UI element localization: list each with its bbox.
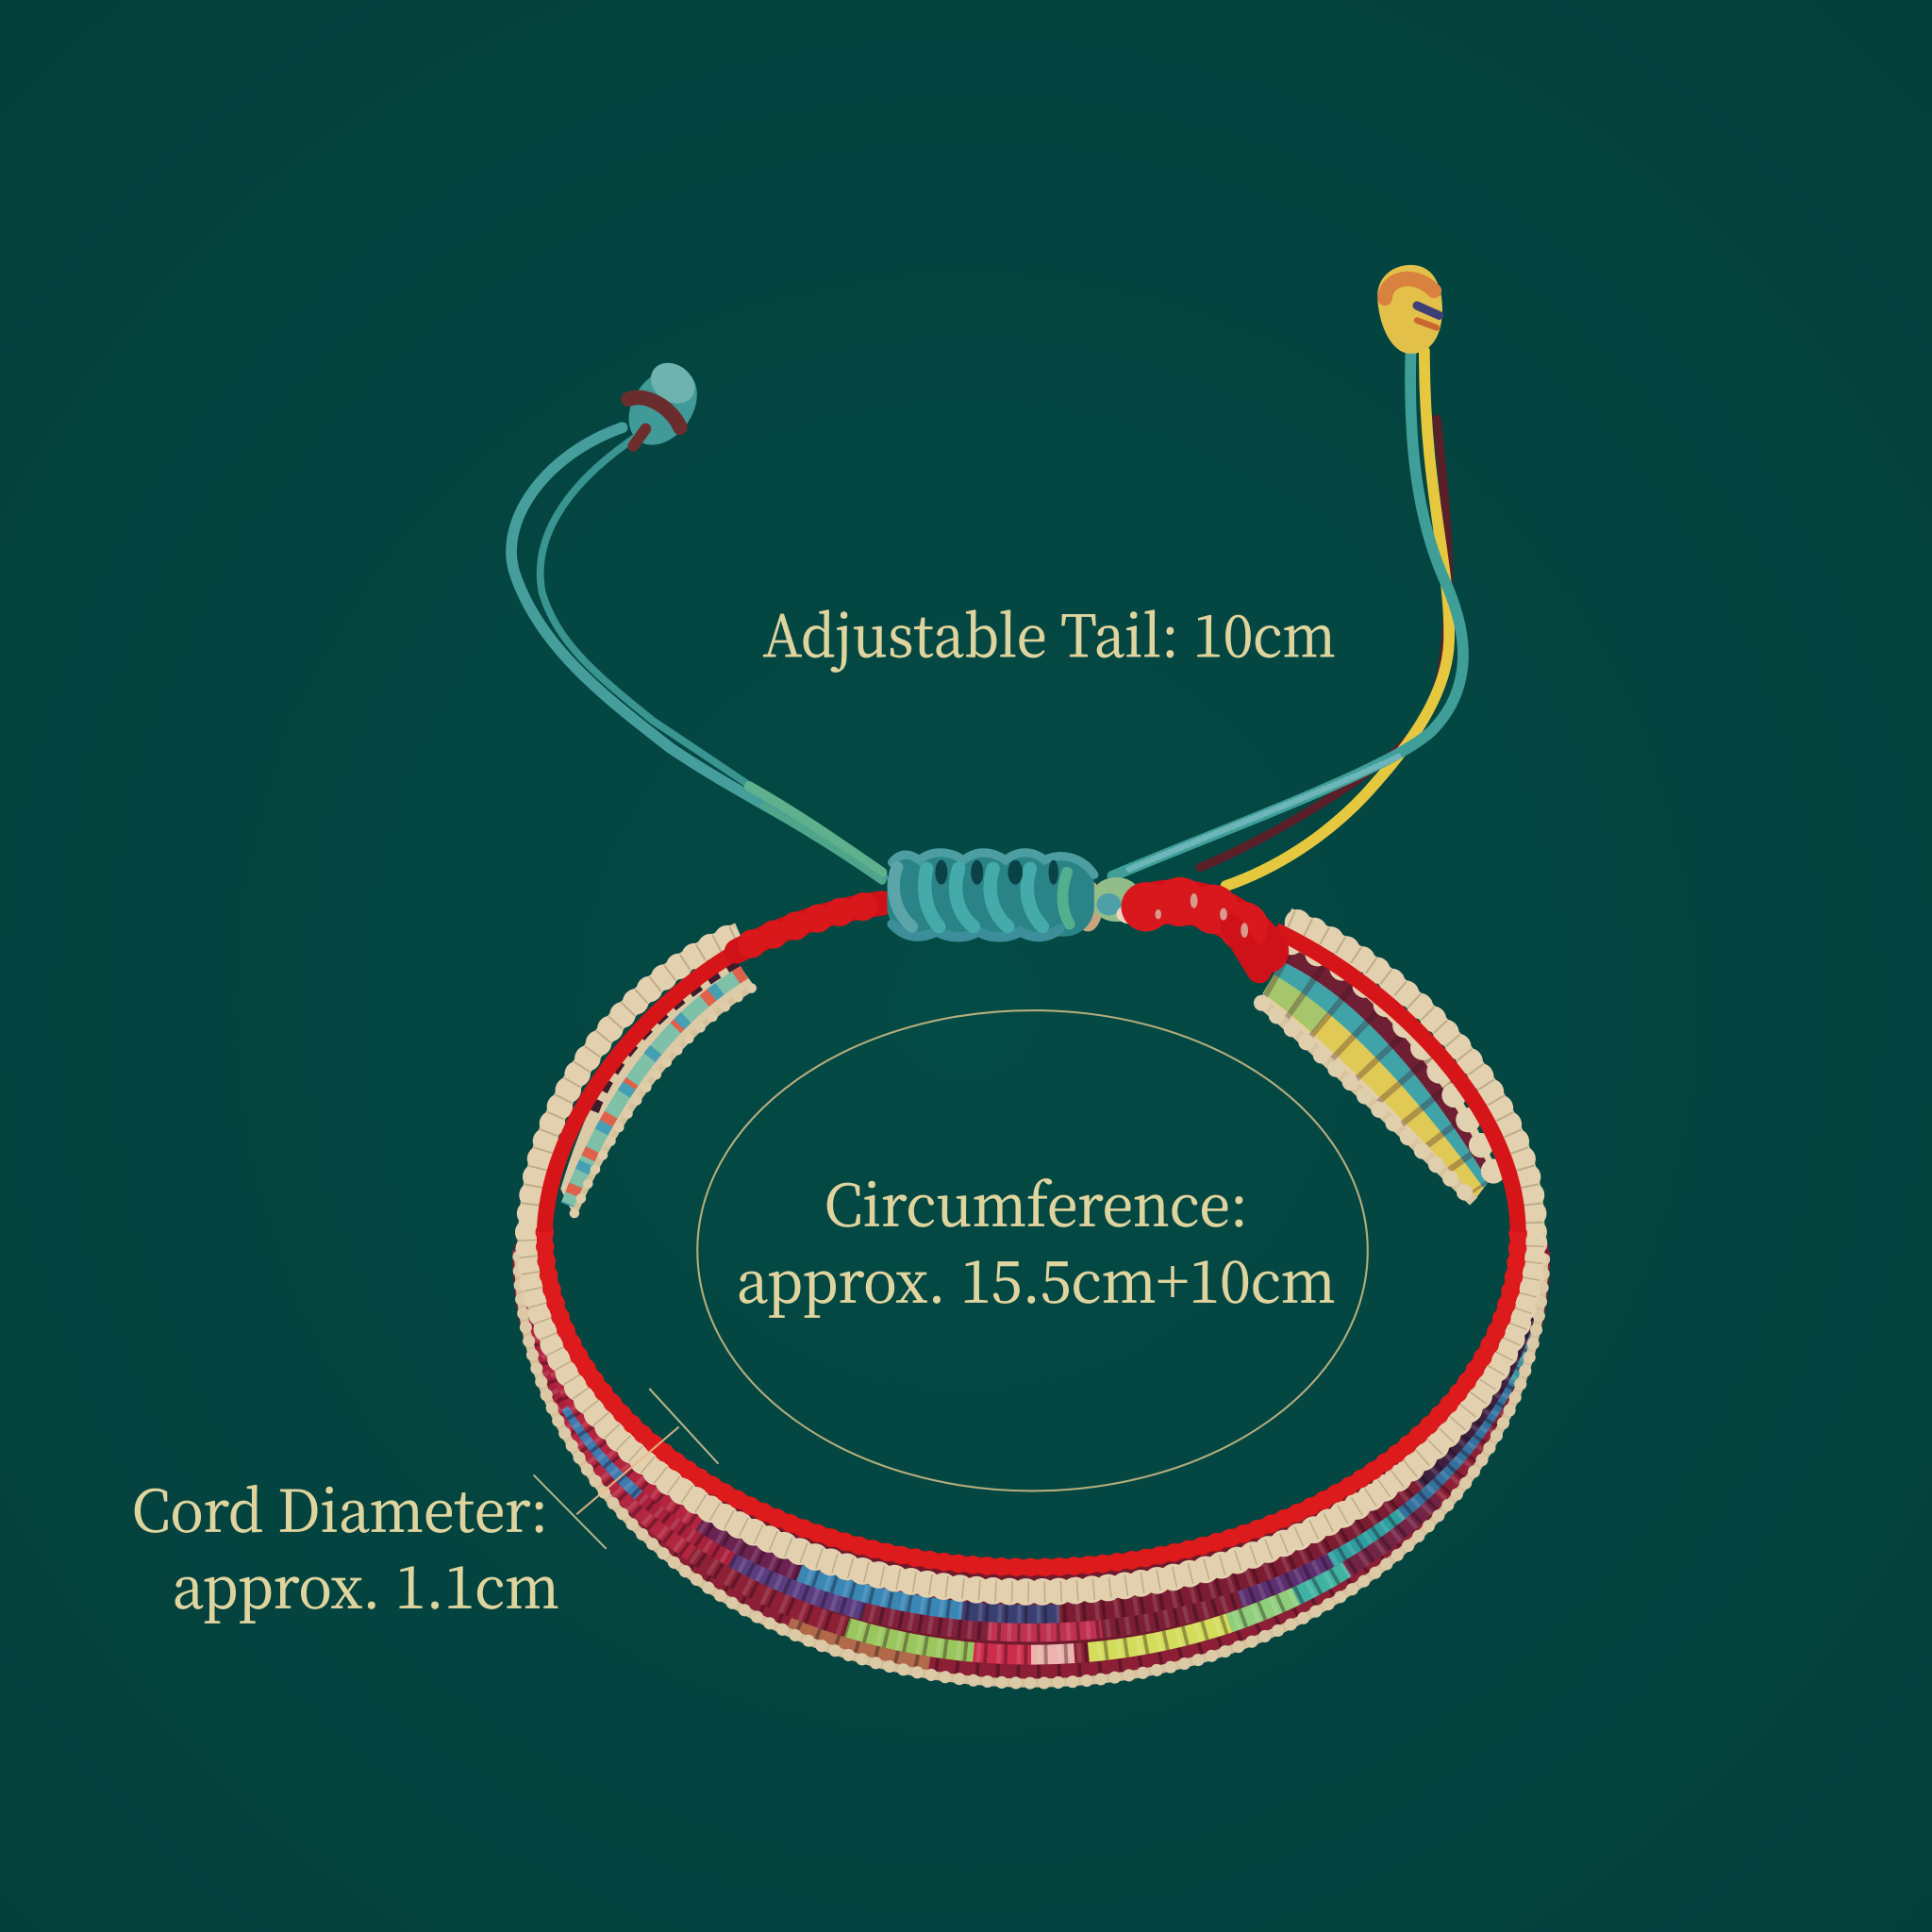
left tail knot bbox=[615, 355, 711, 458]
band: outer rim top left bbox=[528, 933, 740, 1232]
knot dark gaps bbox=[935, 860, 1058, 885]
row: crimson, navy and maroon bbox=[526, 1239, 1537, 1614]
stripe: dark stitches bbox=[591, 961, 737, 1115]
inner beaded edge bbox=[575, 989, 752, 1214]
stripe: yellow bbox=[1263, 974, 1484, 1198]
infographic canvas bbox=[134, 264, 1551, 1690]
band: front woven rows bbox=[519, 1232, 1544, 1683]
band: inner back strip right bbox=[1259, 939, 1497, 1201]
multicolour sliding core bbox=[1074, 877, 1146, 931]
label: cord diameter bbox=[132, 1465, 559, 1624]
right tail knot bbox=[1377, 265, 1442, 354]
left adjustable tail bbox=[511, 355, 882, 881]
row: maroon bbox=[521, 1255, 1541, 1671]
label: circumference bbox=[737, 1159, 1336, 1320]
right adjustable tail bbox=[1112, 265, 1463, 886]
near-red beige beads bbox=[1291, 942, 1494, 1174]
circumference ellipse outline bbox=[697, 1010, 1368, 1491]
left red knot bbox=[737, 903, 882, 951]
right red knot bbox=[1146, 893, 1267, 971]
stripe: maroon bbox=[1281, 947, 1493, 1182]
label: circumference: approx. 15.5cm+10cm bbox=[737, 1236, 1336, 1320]
row: red bbox=[544, 1232, 1518, 1567]
label: cord diameter: approx. 1.1cm bbox=[173, 1541, 559, 1624]
band: outer rim top right bbox=[1288, 918, 1534, 1232]
label: circumference: Circumference: bbox=[824, 1159, 1248, 1243]
row: beige bbox=[528, 1232, 1534, 1592]
row: coloured yellow and green bbox=[523, 1251, 1541, 1655]
stripe: teal bbox=[1274, 961, 1489, 1188]
rows base fill bbox=[519, 1232, 1544, 1683]
knot gaps bbox=[1155, 893, 1248, 938]
band: inner back strip left bbox=[560, 949, 754, 1214]
label: adjustable tail: Adjustable Tail: 10cm bbox=[762, 590, 1336, 674]
stripe ribs bbox=[1276, 970, 1485, 1185]
stripe: green accent bbox=[1263, 974, 1331, 1033]
inner beaded edge bbox=[1261, 1003, 1474, 1201]
stripe: coloured stitches bbox=[568, 973, 744, 1205]
band: red strand top right bbox=[1275, 930, 1518, 1232]
strip base bbox=[1259, 939, 1497, 1201]
label: cord diameter: Cord Diameter: bbox=[132, 1465, 548, 1549]
dimension bracket: cord diameter bbox=[534, 1389, 718, 1549]
teal sliding knot bbox=[887, 853, 1094, 937]
band: red strand top left bbox=[544, 903, 882, 1232]
row: blue and maroon bbox=[524, 1244, 1539, 1633]
row: outer beige edge bbox=[519, 1257, 1544, 1683]
strip base bbox=[560, 949, 754, 1214]
